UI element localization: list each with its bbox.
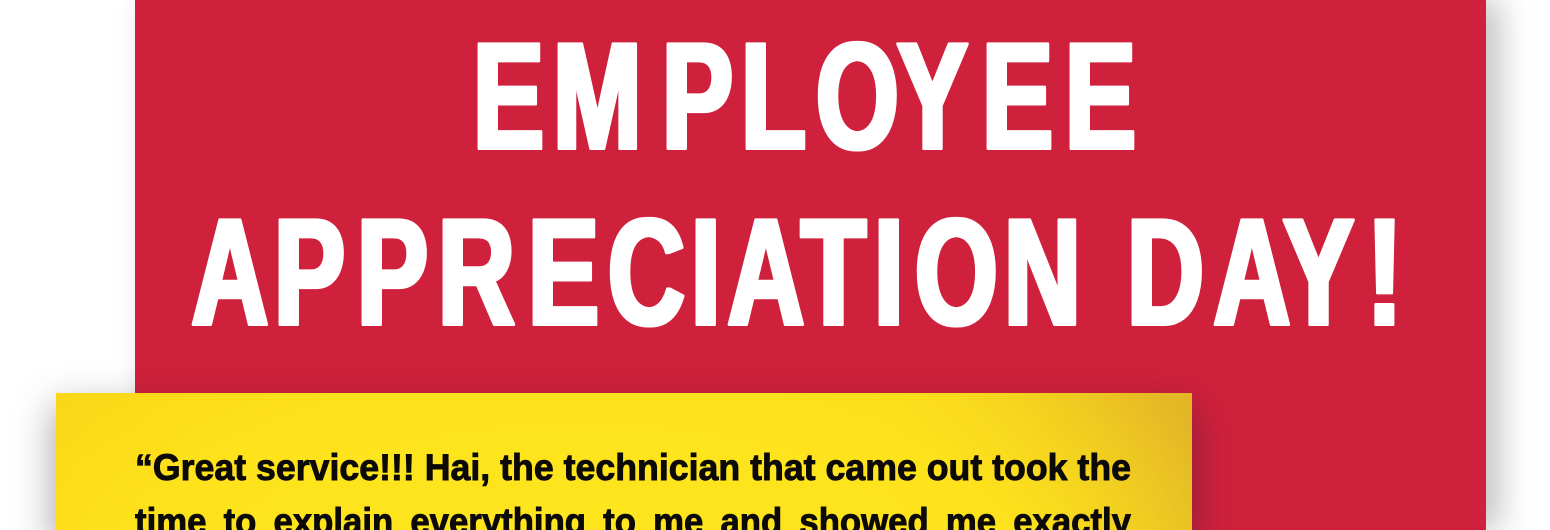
testimonial line 1: “Great service!!! Hai, the technician that came out took the	[135, 447, 1131, 488]
panel: yellow testimonial card	[56, 393, 1192, 530]
title line: APPRECIATION DAY!: APPRECIATION DAY!	[192, 187, 1402, 357]
title	[192, 11, 1402, 357]
title line: EMPLOYEE: EMPLOYEE	[473, 11, 1136, 181]
